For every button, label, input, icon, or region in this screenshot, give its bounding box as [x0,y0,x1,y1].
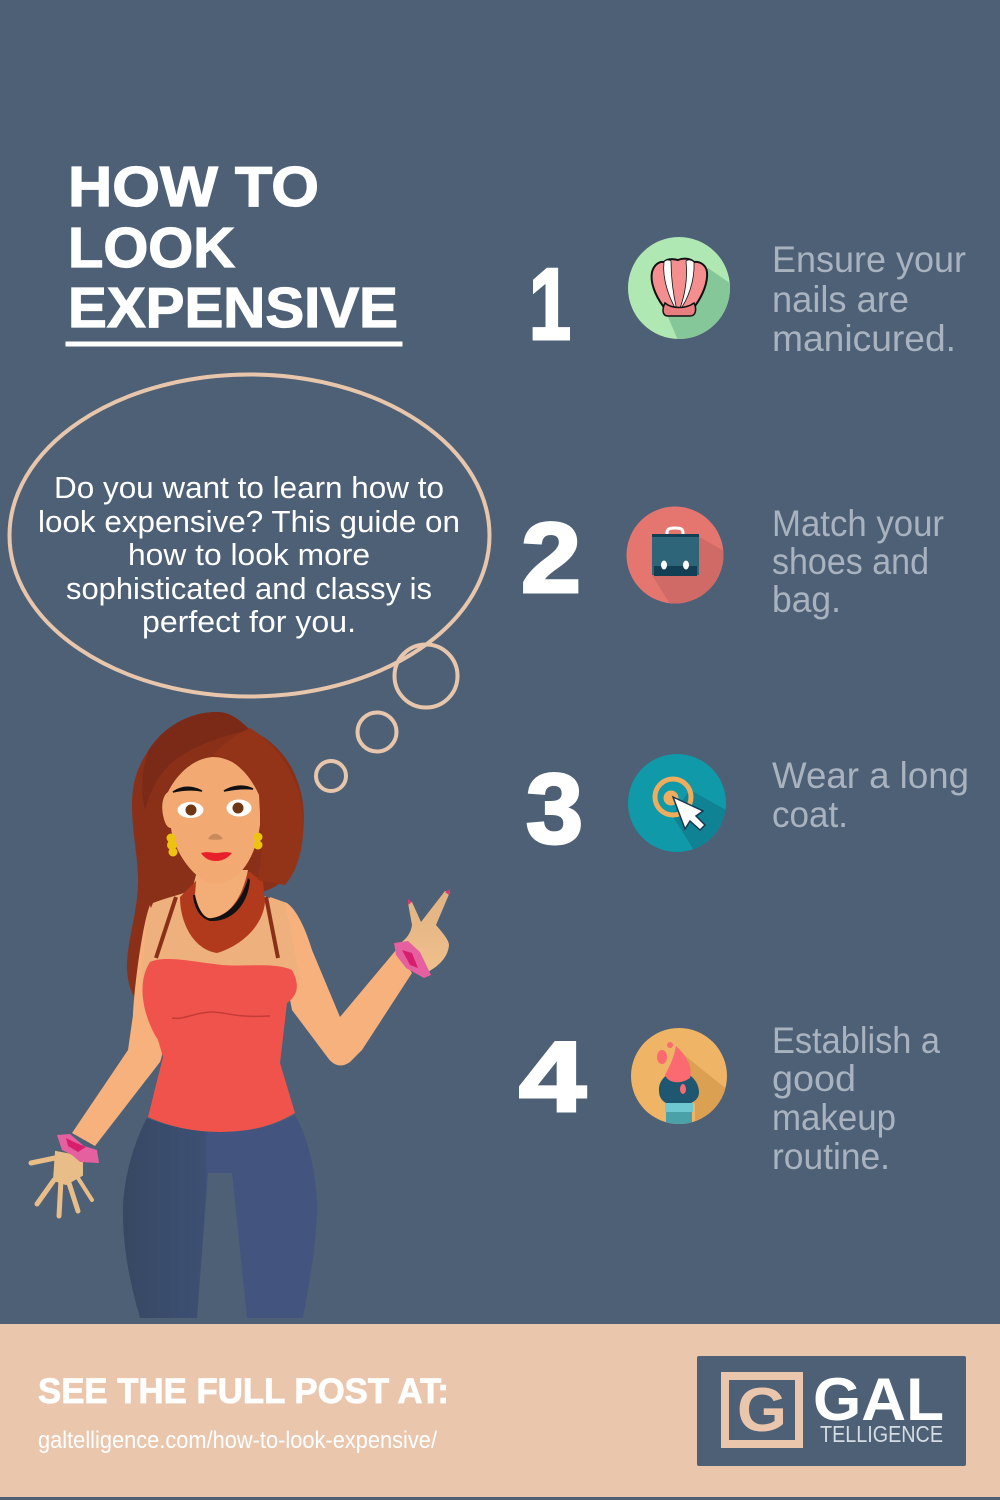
number 3: 3 [526,753,583,864]
right arm [270,897,412,1065]
intro text [38,470,460,639]
step 1 text: Ensure your [772,239,966,280]
intro text: look expensive? This guide on [38,504,460,539]
top seam [172,1012,270,1018]
hair lock [213,728,303,885]
title: EXPENSIVE [68,276,398,340]
scarf [180,872,265,953]
footer band [0,1324,1000,1497]
title [66,155,402,346]
step 1 text: manicured. [772,318,956,359]
chest [140,860,300,985]
nose [208,834,223,840]
step 2 text: shoes and [772,541,929,582]
logo: G [737,1376,787,1445]
step 3 text: Wear a long [772,755,969,796]
illustration: woman pointing [31,712,450,1318]
intro text: how to look more [128,537,370,572]
icon: shell [628,237,730,339]
right wrist scrunchie [394,941,431,978]
step 4 text: routine. [772,1136,890,1177]
step 4 text: Establish a [772,1020,940,1061]
logo: GAL [813,1366,944,1433]
dress straps [156,897,278,958]
logo: TELLIGENCE [820,1421,943,1447]
neck [195,870,248,918]
footer call to action: galtelligence.com/how-to-look-expensive/ [38,1427,437,1454]
icon: cursor target [628,754,726,852]
step 4 text [772,1020,940,1177]
title: LOOK [68,216,235,280]
step 2 text [772,503,944,620]
number 1: 1 [529,249,571,361]
icon: briefcase [626,506,724,604]
left hand [31,1152,92,1216]
red top [142,959,297,1132]
step 4 text: makeup [772,1097,896,1138]
footer call to action [38,1372,449,1454]
scarf inner shadow [193,878,250,921]
trousers [123,1115,317,1318]
step 3 text: coat. [772,794,848,835]
eyes [178,800,252,818]
intro text: Do you want to learn how to [54,470,444,505]
icon: makeup brush [631,1028,727,1124]
step 4 text: good [772,1058,856,1099]
face [162,757,260,884]
step 1 text: nails are [772,279,909,320]
title: HOW TO [68,155,319,219]
footer call to action: SEE THE FULL POST AT: [38,1372,449,1411]
step 2 text: Match your [772,503,944,544]
intro text: perfect for you. [142,604,356,639]
hair [127,712,304,1002]
step 3 text [772,755,969,835]
intro text: sophisticated and classy is [66,571,432,606]
number 2: 2 [521,502,581,613]
earrings [166,832,262,856]
lips [201,852,232,861]
thought bubble [10,374,490,791]
number 4: 4 [519,1021,586,1132]
right hand [398,889,450,972]
logo [697,1356,966,1466]
hair shading [142,712,250,810]
left wrist scrunchie [57,1134,99,1163]
left arm [72,905,165,1146]
step 1 text [772,239,966,359]
step 2 text: bag. [772,579,841,620]
eyebrows [173,786,253,792]
